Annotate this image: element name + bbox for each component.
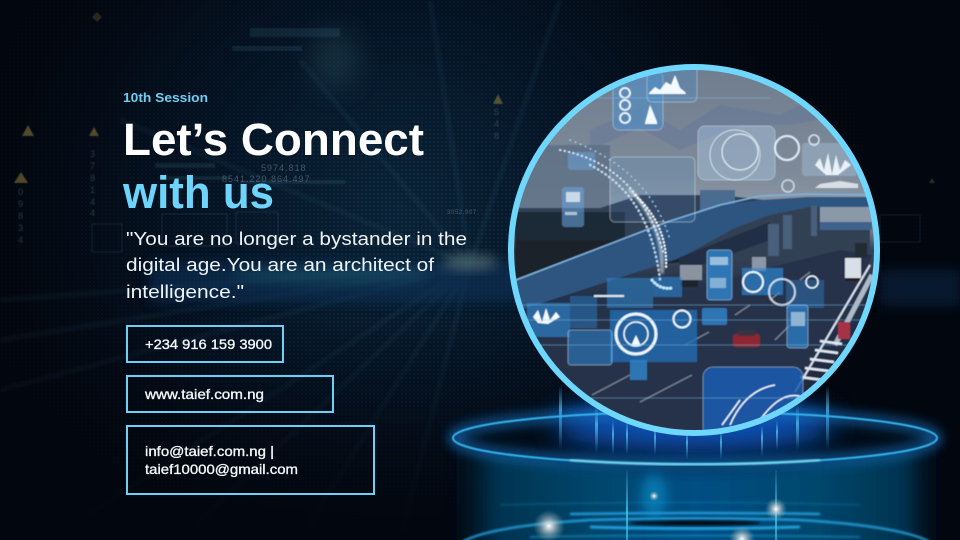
- title: Let’s Connect: [123, 114, 424, 165]
- left sky haze: [519, 144, 610, 208]
- background: futuristic data tunnel: 8: [90, 173, 95, 183]
- light bars: [559, 385, 829, 460]
- background: futuristic data tunnel: 5: [494, 107, 499, 117]
- background: data readouts: 5974.818: [261, 163, 307, 173]
- photo sky and road: [514, 70, 874, 393]
- background: data readouts: 8541.220 864.497: [222, 174, 311, 184]
- background: futuristic data tunnel: 1: [90, 185, 95, 195]
- city strip: [514, 194, 870, 250]
- holographic rings: [616, 88, 819, 425]
- pedestal cylinder: [446, 440, 944, 540]
- title: [122, 114, 424, 218]
- holographic panels: [527, 66, 857, 437]
- blue horizon band: [150, 262, 520, 302]
- quote: intelligence.": [126, 282, 244, 302]
- background: futuristic data tunnel: 0: [18, 187, 23, 197]
- background: futuristic data tunnel: 4: [90, 208, 95, 218]
- pedestal top dark inner: [453, 412, 937, 464]
- right distant sky: [819, 206, 870, 223]
- quote: "You are no longer a bystander in the: [126, 229, 467, 249]
- vehicles: [845, 258, 861, 278]
- lower rings: [462, 502, 930, 540]
- background: futuristic data tunnel: 4: [18, 235, 23, 245]
- contact: email: taief10000@gmail.com: [145, 461, 298, 477]
- background: data readouts: 3052.907: [447, 210, 477, 216]
- quote: digital age.You are an architect of: [126, 255, 435, 275]
- contact: email: info@taief.com.ng |: [145, 443, 274, 459]
- background: data readouts: [222, 163, 477, 216]
- road surface: [560, 250, 872, 430]
- background: futuristic data tunnel: 3: [18, 223, 23, 233]
- overpass: [516, 197, 872, 310]
- background: futuristic data tunnel: 4: [494, 119, 499, 129]
- holographic particle globe: [560, 140, 672, 288]
- contact: email: [127, 426, 374, 494]
- background: futuristic data tunnel: 7: [90, 161, 95, 171]
- contact: website: www.taief.com.ng: [144, 386, 264, 402]
- photo ring: [511, 67, 877, 433]
- pedestal: [446, 385, 944, 540]
- quote: [126, 229, 467, 302]
- contact: phone: +234 916 159 3900: [145, 336, 272, 352]
- background: futuristic data tunnel: 9: [18, 199, 23, 209]
- upward glow behind sphere: [554, 398, 834, 452]
- side barrier and crossing: [795, 265, 870, 392]
- vertical beams and sparks: [641, 474, 667, 518]
- contact: phone: [127, 326, 283, 362]
- watermark band in sky: [590, 106, 818, 150]
- session label: 10th Session: [123, 90, 208, 105]
- lane markings: [592, 272, 810, 402]
- holographic waveforms and bars: [533, 75, 858, 346]
- background: warning markers: [14, 12, 935, 183]
- top ring: [453, 412, 937, 464]
- background: futuristic data tunnel: 8: [494, 131, 499, 141]
- contact: website: [127, 376, 333, 412]
- horizontal scan lines: [510, 98, 880, 398]
- title: with us: [122, 167, 274, 218]
- background: futuristic data tunnel: 4: [90, 197, 95, 207]
- background: futuristic data tunnel: 3: [90, 149, 95, 159]
- circular photo: smart highway: [505, 65, 885, 437]
- background: futuristic data tunnel: 8: [18, 211, 23, 221]
